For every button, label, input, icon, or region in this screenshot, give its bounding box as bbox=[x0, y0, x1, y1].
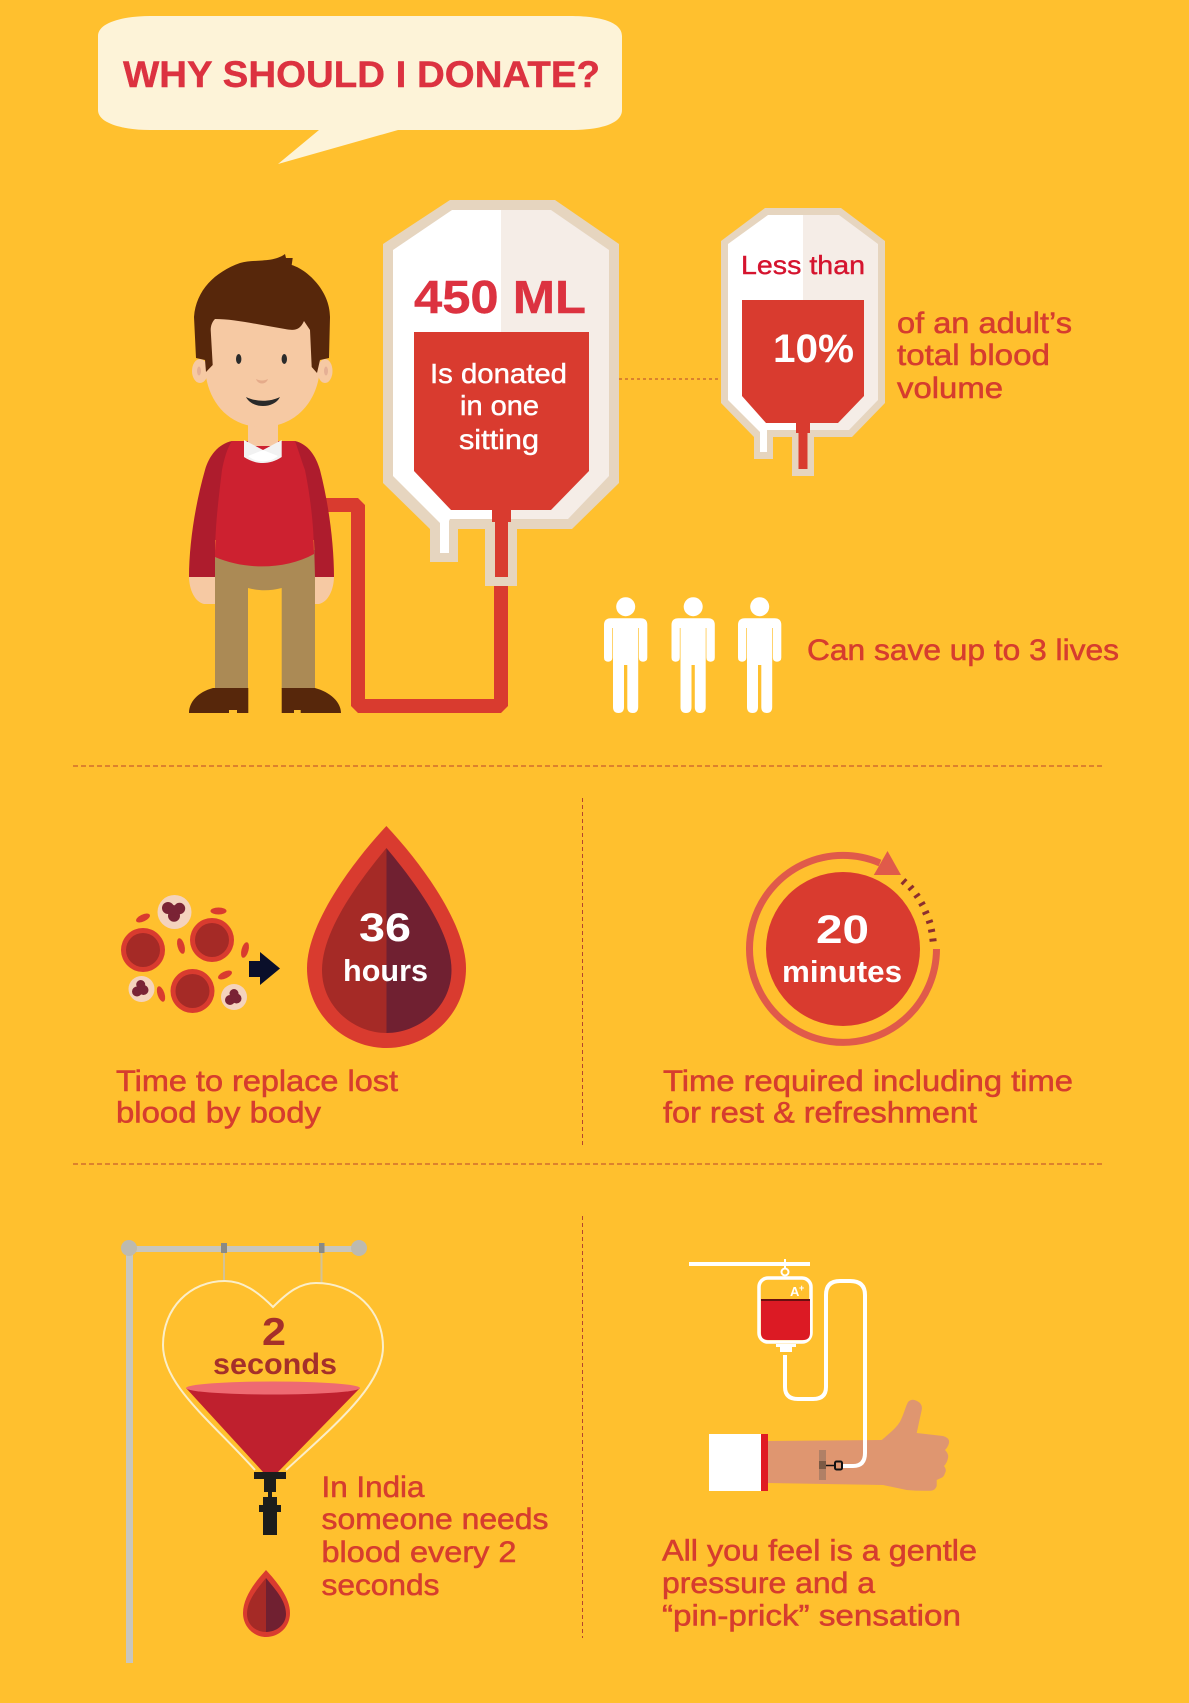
text: replacement time: Time to replace lost bbox=[116, 1065, 398, 1098]
icon: blood drop with 36 hours bbox=[307, 826, 466, 1048]
tube from donor to bag bbox=[320, 498, 508, 713]
icon: blood drop with 36 hours: 36 bbox=[359, 906, 411, 950]
text: saves lives: Can save up to 3 lives bbox=[807, 634, 1119, 667]
text: share of blood volume: total blood bbox=[897, 339, 1050, 372]
person 1 bbox=[604, 597, 647, 713]
ears bbox=[192, 359, 332, 383]
icon: three people bbox=[604, 597, 781, 713]
text: share of blood volume bbox=[897, 307, 1072, 405]
eyes bbox=[236, 354, 287, 364]
white cell bbox=[128, 976, 154, 1002]
icon: drip stand bbox=[121, 1240, 367, 1663]
title speech bubble: WHY SHOULD I DONATE? bbox=[123, 53, 600, 95]
sweater body bbox=[215, 441, 314, 566]
text: time required: for rest & refreshment bbox=[663, 1096, 977, 1130]
text: time required bbox=[663, 1065, 1073, 1130]
icon: transfusion into arm: A bbox=[790, 1284, 800, 1299]
text: pin-prick sensation: All you feel is a gentle bbox=[662, 1534, 977, 1568]
text: pin-prick sensation: “pin-prick” sensation bbox=[662, 1600, 961, 1632]
tube bbox=[785, 1281, 865, 1466]
icon: 20 minutes timer: 20 bbox=[816, 908, 869, 952]
shoes bbox=[189, 688, 341, 713]
arm and thumbs-up hand bbox=[768, 1400, 949, 1491]
nozzle bbox=[254, 1472, 286, 1535]
text: share of blood volume: volume bbox=[897, 372, 1003, 405]
icon: 20 minutes timer: minutes bbox=[782, 954, 902, 989]
small blood bag: Less than bbox=[741, 250, 865, 280]
title speech bubble bbox=[98, 16, 622, 164]
smile bbox=[246, 397, 280, 406]
icon: small falling drop bbox=[243, 1570, 290, 1637]
text: India every 2 seconds: someone needs bbox=[322, 1503, 548, 1536]
cuff bbox=[761, 1434, 768, 1491]
large blood bag: in one bbox=[460, 390, 539, 421]
text: India every 2 seconds bbox=[322, 1471, 548, 1602]
white cell bbox=[221, 984, 247, 1010]
red cell bbox=[190, 918, 234, 962]
hands bbox=[189, 576, 334, 604]
red cell bbox=[121, 928, 165, 972]
icon: heart funnel with 2 seconds: seconds bbox=[213, 1348, 337, 1381]
large blood bag: sitting bbox=[459, 424, 539, 455]
top rail bbox=[689, 1262, 810, 1266]
small blood bag bbox=[721, 208, 885, 476]
sweater sleeves bbox=[189, 441, 334, 577]
red cell bbox=[170, 969, 214, 1013]
ticks bbox=[902, 879, 936, 940]
nose bbox=[256, 379, 268, 384]
large blood bag: Is donated bbox=[430, 358, 567, 389]
text: share of blood volume: of an adult’s bbox=[897, 307, 1072, 340]
text: time required: Time required including time bbox=[663, 1065, 1073, 1098]
large blood bag bbox=[383, 200, 619, 586]
text: India every 2 seconds: seconds bbox=[322, 1569, 440, 1602]
bandage bbox=[819, 1450, 826, 1480]
shirt sleeve bbox=[709, 1434, 761, 1491]
bag outlet bbox=[776, 1344, 796, 1347]
needle bbox=[826, 1464, 834, 1466]
icon: heart funnel with 2 seconds: 2 bbox=[262, 1311, 286, 1354]
bag outline bbox=[759, 1278, 811, 1342]
icon: transfusion into arm bbox=[689, 1259, 949, 1491]
white cell bbox=[158, 895, 192, 929]
dotted connector between bags bbox=[619, 378, 722, 380]
icon: blood drop with 36 hours: hours bbox=[343, 953, 428, 988]
face bbox=[205, 310, 320, 427]
text: replacement time: blood by body bbox=[116, 1096, 321, 1130]
illustration: smiling donor bbox=[189, 254, 341, 713]
arrow bbox=[249, 952, 280, 985]
platelets bbox=[135, 908, 250, 1003]
person 2 bbox=[672, 597, 715, 713]
text: pin-prick sensation bbox=[662, 1534, 977, 1632]
text: India every 2 seconds: blood every 2 bbox=[322, 1536, 516, 1569]
hair bbox=[194, 254, 330, 373]
icon: 20 minutes timer bbox=[750, 851, 936, 1042]
small blood bag: 10% bbox=[773, 327, 854, 371]
large blood bag: 450 ML bbox=[414, 271, 586, 323]
trousers bbox=[215, 550, 315, 689]
neck bbox=[248, 420, 278, 446]
text: replacement time bbox=[116, 1065, 398, 1130]
bag blood bbox=[761, 1300, 810, 1340]
icon: transfusion into arm: + bbox=[799, 1283, 804, 1293]
icon: heart funnel with 2 seconds bbox=[163, 1281, 383, 1535]
text: India every 2 seconds: In India bbox=[322, 1471, 425, 1504]
icon: blood cells bbox=[121, 895, 250, 1013]
collar bbox=[244, 440, 282, 463]
text: pin-prick sensation: pressure and a bbox=[662, 1567, 876, 1600]
person 3 bbox=[738, 597, 781, 713]
